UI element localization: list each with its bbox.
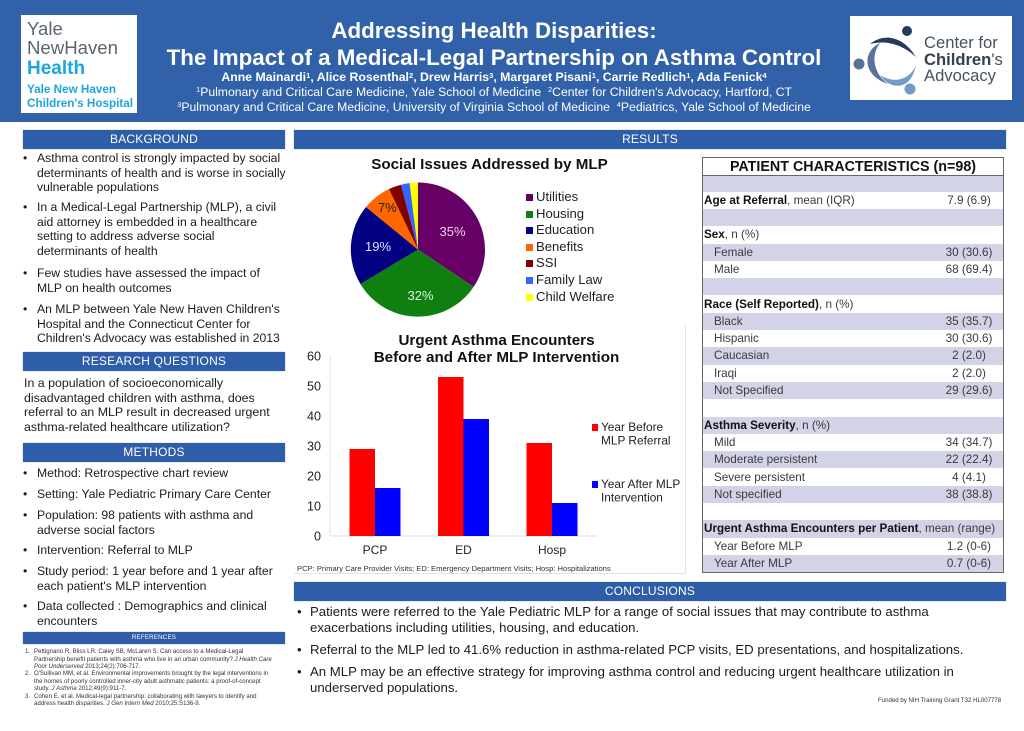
section header: background bbox=[23, 130, 285, 149]
row: year after MLP: 0.7 (0-6) bbox=[947, 557, 991, 570]
bar chart title bbox=[374, 332, 619, 366]
row: year after MLP: Year After MLP bbox=[714, 557, 792, 570]
bar chart: 10 bbox=[307, 500, 321, 514]
bar chart title: Urgent Asthma Encounters bbox=[398, 332, 595, 348]
row: hispanic bbox=[714, 332, 992, 345]
row: black: Black bbox=[714, 315, 743, 328]
logo: Yale New Haven Health bbox=[21, 15, 137, 113]
bullet: Yale MLP: Hospital and the Connecticut Center for bbox=[37, 317, 250, 331]
row: race not specified bbox=[703, 382, 1003, 399]
row: mild: 34 (34.7) bbox=[946, 436, 992, 449]
conclusion: range of issues bbox=[310, 604, 929, 636]
logo: Yale New Haven Health: Children's Hospital bbox=[27, 96, 133, 110]
conclusion: 41.6% reduction: Referral to the MLP led to 41.6% reduction in asthma-related PCP visits, ED presentations, and hospitalizations. bbox=[310, 642, 963, 657]
row: severity not specified: 38 (38.8) bbox=[946, 488, 992, 501]
section header: references: REFERENCES bbox=[132, 634, 176, 641]
bullet: asthma control bbox=[37, 151, 286, 195]
row: female: 30 (30.6) bbox=[946, 246, 992, 259]
section header: research questions bbox=[23, 352, 285, 371]
bullet: data collected: Data collected : Demographics and clinical bbox=[37, 599, 267, 613]
row: caucasian: Caucasian bbox=[714, 349, 769, 362]
bar chart: 50 bbox=[307, 380, 321, 394]
title bbox=[166, 18, 821, 70]
legend item: education: Education bbox=[536, 222, 594, 237]
row: moderate persistent bbox=[703, 451, 1003, 468]
row: severe persistent: Severe persistent bbox=[714, 470, 805, 484]
section header: results: RESULTS bbox=[622, 132, 678, 146]
research question text: referral to an MLP result in decreased urgent bbox=[24, 405, 270, 419]
row: male bbox=[714, 263, 992, 276]
bullet: study period: Study period: 1 year before and 1 year after bbox=[37, 564, 273, 578]
row: race heading: Race (Self Reported), n (%) bbox=[704, 298, 853, 310]
affiliations bbox=[177, 84, 811, 114]
icon: circle of figures bbox=[854, 26, 916, 94]
section header: references bbox=[23, 632, 285, 644]
bullet: what is an MLP: setting to address adverse social bbox=[37, 229, 214, 243]
row: caucasian: 2 (2.0) bbox=[952, 349, 986, 362]
bullet: few studies: Few studies have assessed the impact of bbox=[37, 266, 260, 280]
pie chart: 35% bbox=[440, 224, 466, 239]
bar chart: 30 bbox=[307, 440, 321, 454]
bar chart: Year After MLP bbox=[601, 477, 680, 491]
methods bullet list bbox=[24, 466, 273, 628]
references list bbox=[25, 648, 272, 707]
logo: Center for Children's Advocacy: Advocacy bbox=[924, 66, 996, 85]
bullet: setting: Setting: Yale Pediatric Primary Care Center bbox=[37, 487, 271, 501]
bullet: what is an MLP: In a Medical-Legal Partnership (MLP), a civil bbox=[37, 200, 276, 214]
bullet: what is an MLP bbox=[37, 200, 276, 259]
row: iraqi: 2 (2.0) bbox=[952, 367, 986, 380]
row: year after MLP bbox=[703, 555, 1003, 572]
table title: PATIENT CHARACTERISTICS (n=98) bbox=[730, 159, 976, 175]
row: race not specified: Not Specified bbox=[714, 384, 784, 397]
references list: Partnership benefit patients with asthma who live in an urban community? J Health Care bbox=[34, 656, 272, 662]
conclusion: effective strategy: An MLP may be an effective strategy for improving asthma control and reducing urgent healthcare utilization in bbox=[310, 664, 954, 679]
row: severe persistent bbox=[714, 470, 986, 484]
bullet: asthma control: vulnerable populations bbox=[37, 180, 159, 194]
row: race not specified: 29 (29.6) bbox=[946, 384, 992, 397]
affiliations: 3Pulmonary and Critical Care Medicine, University of Virginia School of Medicine 4Pediatrics, Yale School of Medicine bbox=[177, 100, 811, 114]
bullet: population bbox=[37, 508, 253, 537]
bullet: what is an MLP: determinants of health bbox=[37, 244, 158, 258]
row: caucasian bbox=[703, 347, 1003, 365]
row: black: 35 (35.7) bbox=[946, 315, 992, 328]
references list: the homes of poorly controlled inner-city adult asthmatic patients: a proof-of-concept bbox=[34, 678, 261, 685]
conclusion: effective strategy: underserved populations. bbox=[310, 680, 458, 695]
row: asthma severity heading: Asthma Severity, n (%) bbox=[704, 419, 830, 432]
bar chart: Intervention bbox=[601, 490, 663, 504]
logo: Center for Children's Advocacy bbox=[850, 16, 1012, 100]
references list: O'Sullivan MM, et al. Environmental improvements brought by the legal interventions in bbox=[34, 670, 268, 677]
row: year before MLP: Year Before MLP bbox=[714, 540, 803, 553]
row: female bbox=[703, 244, 1003, 261]
patient characteristics table bbox=[702, 157, 1004, 573]
funding note: Funded by NIH Training Grant T32 HL007778 bbox=[878, 697, 1001, 704]
affiliations: 1Pulmonary and Critical Care Medicine, Yale School of Medicine 2Center for Children's Advocacy, Hartford, CT bbox=[196, 84, 792, 98]
bullet: asthma control: determinants of health and is worse in socially bbox=[37, 166, 286, 180]
row: hispanic: 30 (30.6) bbox=[946, 332, 992, 345]
bullet: asthma control: Asthma control is strongly impacted by social bbox=[37, 151, 280, 165]
bullet: Yale MLP bbox=[37, 302, 280, 346]
research question text: asthma-related healthcare utilization? bbox=[24, 420, 230, 434]
bullet: data collected: encounters bbox=[37, 614, 97, 628]
conclusions bullet list bbox=[298, 604, 963, 695]
section header: conclusions: CONCLUSIONS bbox=[605, 584, 695, 598]
row: age at referral bbox=[704, 194, 991, 207]
row: iraqi bbox=[714, 367, 986, 380]
section header: conclusions bbox=[294, 582, 1006, 601]
bar chart: Hosp bbox=[538, 543, 566, 557]
row: mild bbox=[714, 436, 992, 449]
authors: Anne Mainardi1, Alice Rosenthal2, Drew Harris3, Margaret Pisani1, Carrie Redlich1, Ada Fenick4 bbox=[221, 70, 767, 84]
bullet: intervention: Intervention: Referral to MLP bbox=[37, 543, 193, 557]
bullet: study period bbox=[37, 564, 273, 593]
research question text bbox=[24, 376, 270, 434]
research question text: disadvantaged children with asthma, does bbox=[24, 391, 255, 405]
logo: Yale New Haven Health: NewHaven bbox=[27, 37, 118, 58]
bullet: few studies bbox=[37, 266, 260, 295]
bar chart: MLP Referral bbox=[601, 434, 671, 448]
bar chart title: Before and After MLP Intervention bbox=[374, 349, 619, 366]
bar chart: PCP bbox=[363, 543, 387, 557]
row: asthma severity heading bbox=[703, 417, 1003, 434]
pie chart title: Social Issues Addressed by MLP bbox=[371, 156, 608, 173]
legend item: benefits: Benefits bbox=[536, 239, 583, 254]
row: moderate persistent: 22 (22.4) bbox=[946, 453, 992, 466]
references list: study. J Asthma 2012;49(9):911-7. bbox=[34, 685, 126, 692]
bullet: data collected bbox=[37, 599, 267, 628]
row: male: Male bbox=[714, 263, 739, 276]
bar chart: Year Before bbox=[601, 420, 664, 434]
title: The Impact of a Medical-Legal Partnership on Asthma Control bbox=[167, 45, 821, 70]
row: severe persistent: 4 (4.1) bbox=[952, 470, 986, 484]
legend item: housing: Housing bbox=[536, 206, 584, 221]
conclusion: range of issues: exacerbations including utilities, housing, and education. bbox=[310, 620, 639, 635]
row: mild: Mild bbox=[714, 436, 735, 449]
bullet: Yale MLP: An MLP between Yale New Haven Children's bbox=[37, 302, 280, 316]
conclusion: effective strategy bbox=[310, 664, 954, 696]
references list: address health disparities. J Gen Intern Med 2010;25:S136-9. bbox=[34, 700, 200, 707]
pie chart legend bbox=[526, 189, 614, 304]
bullet: few studies: MLP on health outcomes bbox=[37, 281, 172, 295]
logo: Center for Children's Advocacy: Children's bbox=[924, 50, 1003, 68]
references list: Pettignano R, Bliss LR, Caley SB, McLaren S. Can access to a Medical-Legal bbox=[34, 648, 243, 655]
legend item: child welfare: Child Welfare bbox=[536, 289, 614, 304]
bullet: population: adverse social factors bbox=[37, 523, 155, 537]
row: hispanic: Hispanic bbox=[714, 332, 759, 345]
logo: Yale New Haven Health: Health bbox=[27, 58, 85, 79]
row: male: 68 (69.4) bbox=[946, 263, 992, 276]
bar chart bbox=[307, 350, 680, 557]
references list: 1. bbox=[25, 648, 30, 655]
row: severity not specified bbox=[703, 486, 1003, 503]
row: urgent encounters heading: Urgent Asthma Encounters per Patient, mean (range) bbox=[704, 522, 995, 535]
references list: Cohen E, et al. Medical-legal partnership: collaborating with lawyers to identify and bbox=[34, 693, 257, 700]
bar chart: ED bbox=[455, 543, 472, 557]
bar chart: 60 bbox=[307, 350, 321, 364]
bar chart: 0 bbox=[314, 530, 321, 544]
research question text: In a population of socioeconomically bbox=[24, 376, 223, 390]
logo: Center for Children's Advocacy: Center for bbox=[924, 33, 998, 52]
references list: 2. bbox=[25, 670, 30, 677]
row: black bbox=[703, 313, 1003, 330]
row: age at referral: 7.9 (6.9) bbox=[947, 194, 991, 207]
row: year before MLP bbox=[714, 540, 991, 553]
title: Addressing Health Disparities: bbox=[331, 18, 657, 43]
logo: Yale New Haven Health: Yale bbox=[27, 18, 63, 39]
pie chart bbox=[350, 182, 485, 317]
legend item: family law: Family Law bbox=[536, 272, 602, 287]
section header: background: BACKGROUND bbox=[110, 132, 198, 146]
section header: methods bbox=[23, 443, 285, 462]
header banner bbox=[0, 0, 1024, 122]
bar chart footnote: PCP: Primary Care Provider Visits; ED: Emergency Department Visits; Hosp: Hospitalizations bbox=[297, 564, 611, 573]
pie chart: 32% bbox=[408, 288, 434, 303]
row: iraqi: Iraqi bbox=[714, 367, 737, 380]
legend item: SSI bbox=[526, 255, 557, 270]
bar chart: 20 bbox=[307, 470, 321, 484]
pie chart: 7% bbox=[378, 200, 397, 215]
logo: Yale New Haven Health: Yale New Haven bbox=[27, 83, 116, 96]
row: female: Female bbox=[714, 246, 753, 259]
bar chart panel: urgent encounters bbox=[294, 325, 686, 574]
pie chart panel: social issues bbox=[350, 156, 614, 317]
section header: results bbox=[294, 130, 1006, 149]
conclusion: range of issues: Patients were referred to the Yale Pediatric MLP for a range of social issues that may contribute to asthma bbox=[310, 604, 929, 619]
row: year before MLP: 1.2 (0-6) bbox=[947, 540, 991, 553]
pie chart: 19% bbox=[365, 239, 391, 254]
references list: 3. bbox=[25, 693, 30, 700]
row: age at referral: Age at Referral, mean (IQR) bbox=[704, 194, 855, 207]
section header: research questions: RESEARCH QUESTIONS bbox=[82, 354, 226, 368]
background bullet list bbox=[24, 151, 286, 345]
bullet: population: Population: 98 patients with asthma and bbox=[37, 508, 253, 522]
bullet: study period: each patient's MLP intervention bbox=[37, 579, 206, 593]
legend item: utilities: Utilities bbox=[536, 189, 578, 204]
references list: Poor Underserved 2013;24(2):706-717. bbox=[34, 663, 140, 670]
bullet: Yale MLP: Children's Advocacy was established in 2013 bbox=[37, 331, 280, 345]
row: severity not specified: Not specified bbox=[714, 488, 782, 501]
row: moderate persistent: Moderate persistent bbox=[714, 453, 817, 466]
bullet: method: Method: Retrospective chart review bbox=[37, 466, 228, 480]
section header: methods: METHODS bbox=[123, 445, 185, 459]
row: sex heading: Sex, n (%) bbox=[704, 228, 759, 241]
bullet: what is an MLP: aid attorney is embedded in a healthcare bbox=[37, 215, 257, 229]
legend item: SSI: SSI bbox=[536, 255, 557, 270]
bar chart: 40 bbox=[307, 410, 321, 424]
